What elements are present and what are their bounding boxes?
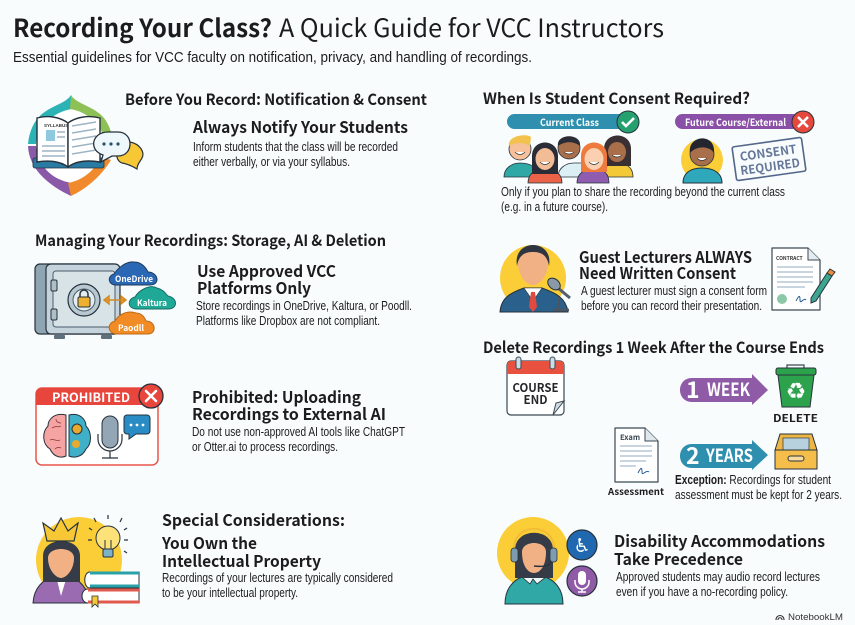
icon: wheelchair accessibility [567, 530, 597, 560]
panel: special considerations [33, 507, 393, 607]
panel: guest lecturers [500, 244, 835, 313]
heading: managing: Managing Your Recordings: Storage, AI & Deletion [35, 229, 386, 251]
text: prohibited body [192, 425, 405, 454]
icon: recycling bin [776, 365, 816, 407]
icon: exam document [615, 428, 658, 482]
arrow: 2 years: YEARS [705, 442, 753, 468]
subheading: prohibited: Prohibited: Uploading [192, 384, 361, 408]
title [13, 9, 664, 45]
text: guest body: before you can record their presentation. [581, 299, 762, 313]
text: exception: Exception: Recordings for student [675, 473, 831, 487]
subheading: approved platforms: Platforms Only [197, 275, 311, 299]
text: prohibited body: Do not use non-approved AI tools like ChatGPT [192, 425, 405, 439]
text: property body: Recordings of your lectures are typically considered [162, 571, 393, 585]
title: Recording Your Class? [13, 9, 272, 45]
heading: student consent: When Is Student Consent Required? [483, 87, 750, 109]
heading: delete recordings: Delete Recordings 1 Week After the Course Ends [483, 336, 824, 358]
label: delete: DELETE [773, 411, 818, 426]
icon: course end calendar [507, 357, 564, 415]
subheading: disability: Disability Accommodations [614, 528, 825, 552]
icon: syllabus book with speech bubbles [28, 95, 143, 196]
icon: exam document: Exam [620, 432, 640, 443]
pill: current class [507, 111, 639, 133]
subheading: guest lecturers: Guest Lecturers ALWAYS [579, 244, 752, 268]
text: exception [675, 473, 842, 502]
icon: syllabus book with speech bubbles: SYLLABUS [44, 123, 68, 128]
text: guest body: A guest lecturer must sign a consent form [581, 284, 767, 298]
icon: prohibited card with brain and microphone: PROHIBITED [52, 387, 130, 406]
icon: student with headset [497, 517, 569, 604]
pill: future course: Future Course/External [685, 114, 786, 129]
stamp: consent required [732, 137, 806, 181]
panel: before you record [28, 88, 427, 196]
icon: individual student [681, 138, 723, 183]
icon: archive box [775, 434, 817, 469]
icon: wheelchair accessibility: ♿ [573, 535, 591, 557]
heading: special considerations: Special Considerations: [162, 507, 345, 531]
subheading: disability: Take Precedence [614, 546, 743, 570]
arrow: 1 week: WEEK [707, 376, 751, 402]
pill: current class: Current Class [540, 114, 599, 129]
subheading: intellectual property: Intellectual Property [162, 548, 321, 572]
arrow: 2 years [680, 437, 768, 471]
arrow: 2 years: 2 [686, 437, 700, 471]
panel: managing your recordings [35, 229, 412, 339]
panel: delete recordings [483, 336, 842, 502]
icon: contract with pen [772, 248, 835, 310]
icon: course end calendar: END [524, 391, 548, 408]
watermark: NotebookLM: NotebookLM [788, 612, 843, 622]
icon: safe with cloud platforms: Paodll [118, 322, 144, 334]
stamp: consent required: REQUIRED [739, 154, 801, 179]
panel: student consent [483, 87, 814, 214]
arrow: 1 week [680, 371, 768, 405]
heading: before you record: Before You Record: Notification & Consent [125, 88, 427, 110]
text: property body: to be your intellectual property. [162, 586, 298, 600]
icon: safe with cloud platforms: OneDrive [115, 273, 153, 285]
label: assessment: Assessment [607, 484, 664, 498]
icon: instructor with crown, bulb and books [33, 515, 139, 607]
panel: disability accommodations [497, 517, 825, 604]
subtitle: Essential guidelines for VCC faculty on notification, privacy, and handling of recordings. [13, 49, 532, 66]
subheading: guest lecturers: Need Written Consent [579, 260, 736, 284]
subheading: disability [614, 528, 825, 570]
text: platforms body: Store recordings in OneDrive, Kaltura, or Poodll. [196, 299, 412, 313]
subheading: always notify: Always Notify Your Students [192, 114, 408, 138]
text: property body [162, 571, 393, 600]
title: A Quick Guide for VCC Instructors [279, 9, 664, 45]
text: notify body: either verbally, or via your syllabus. [193, 155, 350, 169]
subheading: guest lecturers [579, 244, 752, 284]
icon: safe with cloud platforms [35, 262, 176, 339]
icon: guest lecturer at microphone [500, 245, 570, 312]
subheading: approved platforms: Use Approved VCC [197, 258, 336, 282]
text: notify body: Inform students that the class will be recorded [193, 140, 398, 154]
icon: course end calendar: COURSE [512, 379, 558, 396]
icon: microphone [567, 566, 597, 596]
text: prohibited body: or Otter.ai to process recordings. [192, 440, 338, 454]
icon: contract with pen: CONTRACT [776, 255, 803, 262]
text: consent body: (e.g. in a future course). [501, 200, 608, 214]
panel: prohibited AI [36, 384, 405, 465]
icon: class group of students [504, 135, 633, 183]
text: guest body [581, 284, 767, 313]
text: disability body [616, 570, 820, 599]
icon: prohibited card with brain and microphone [36, 384, 163, 465]
text: notify body [193, 140, 398, 169]
text: disability body: even if you have a no-recording policy. [616, 585, 788, 599]
text: platforms body: Platforms like Dropbox are not compliant. [196, 314, 380, 328]
icon: recycling bin: ♻ [786, 379, 806, 405]
text: consent body: Only if you plan to share the recording beyond the current class [501, 185, 785, 199]
stamp: consent required: CONSENT [739, 140, 798, 165]
arrow: 1 week: 1 [686, 371, 700, 405]
subheading: prohibited: Recordings to External AI [192, 401, 386, 425]
subheading: prohibited [192, 384, 386, 425]
icon: safe with cloud platforms: Kaltura [137, 297, 167, 309]
subheading: intellectual property [161, 530, 321, 572]
text: consent body [501, 185, 785, 214]
subheading: approved platforms [197, 258, 336, 299]
pill: future course [675, 111, 814, 133]
subheading: intellectual property: You Own the [161, 530, 257, 554]
text: platforms body [196, 299, 412, 328]
